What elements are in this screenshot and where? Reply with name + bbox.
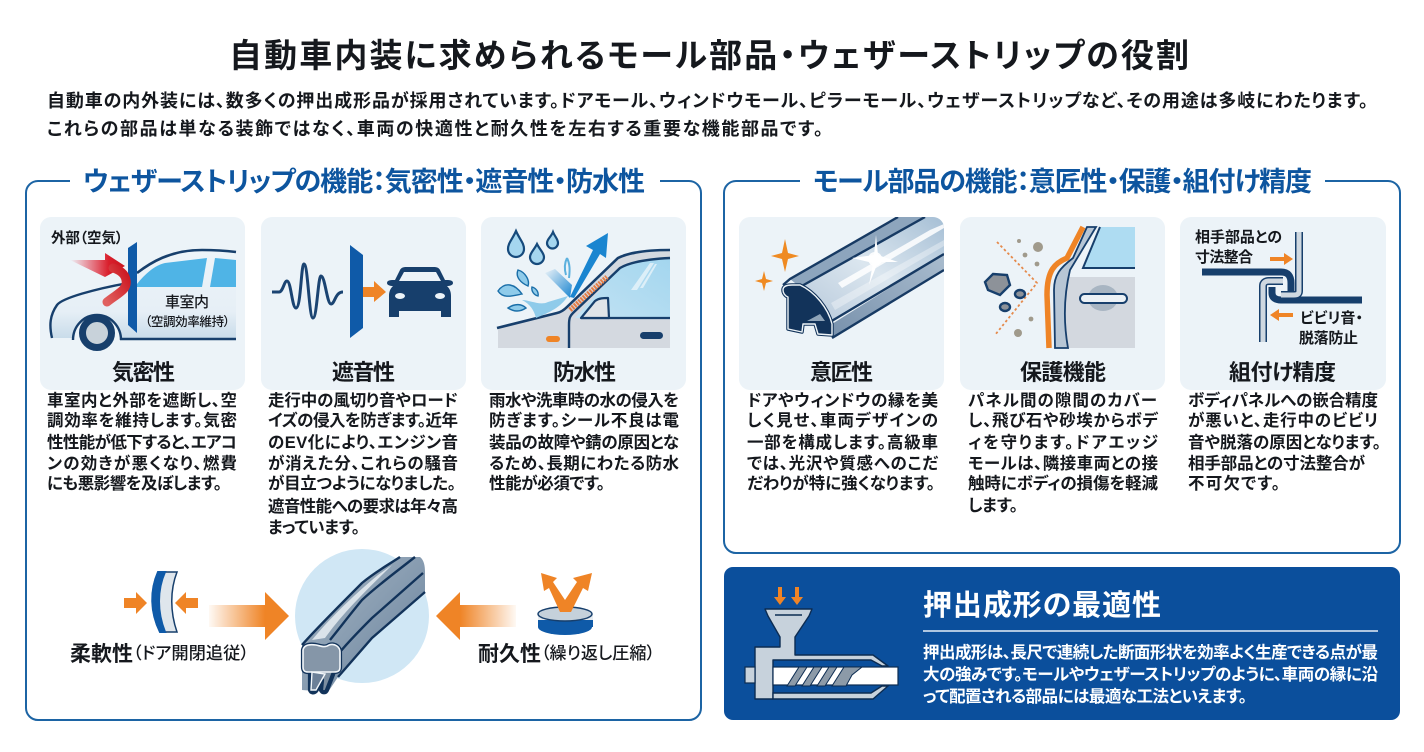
card title: 組付け精度	[1229, 360, 1336, 385]
icon: extruder	[745, 587, 898, 699]
body text: airtightness: ンの効きが悪くなり、燃費	[47, 453, 237, 473]
arrow: left	[209, 592, 289, 640]
label: outside: 外部（空気）	[51, 229, 123, 247]
banner text: 大の強みです。モールやウェザーストリップのように、車両の縁に沿	[923, 664, 1378, 684]
arrow: right	[436, 592, 516, 640]
card title: 遮音性	[332, 360, 395, 385]
body text: design: では、光沢や質感へのこだ	[747, 453, 938, 473]
card: waterproof	[481, 217, 686, 390]
card: airtightness	[40, 217, 245, 390]
body text: airtightness: にも悪影響を及ぼします。	[47, 473, 222, 493]
body text: design: しく見せ、車両デザインの	[747, 410, 938, 430]
label: flexibility: 柔軟性	[70, 643, 133, 666]
body text: protection	[968, 391, 1159, 515]
diagram: weatherstrip properties	[70, 549, 655, 692]
body text: sound insulation: が消えた分、これらの騒音	[268, 453, 458, 473]
body text: assembly: 不可欠です。	[1188, 473, 1280, 493]
body text: design	[747, 390, 938, 493]
label: durability	[478, 643, 655, 666]
body text: assembly: が悪いと、走行中のビビリ	[1188, 410, 1378, 430]
body text: assembly: 音や脱落の原因となります。	[1188, 432, 1381, 452]
label: rattle: ビビリ音・	[1300, 309, 1363, 327]
body text: protection: ィを守ります。ドアエッジ	[968, 433, 1158, 452]
icon: fit diagram: 寸法整合	[1195, 248, 1253, 266]
body text: waterproof	[489, 391, 680, 493]
card: protection	[960, 217, 1165, 390]
body text: sound insulation: 走行中の風切り音やロード	[268, 390, 458, 410]
body text: assembly: ボディパネルへの嵌合精度	[1188, 390, 1378, 410]
body text: sound insulation: 遮音性能への要求は年々高	[268, 496, 458, 516]
card title: 保護機能	[1020, 360, 1106, 385]
body text: design: ドアやウィンドウの縁を美	[747, 390, 938, 410]
body text: airtightness: 性性能が低下すると、エアコ	[47, 432, 237, 452]
body text: protection: パネル間の隙間のカバー	[968, 391, 1157, 410]
banner text: 押出成形は、長尺で連続した断面形状を効率よく生産できる点が最	[923, 642, 1378, 662]
intro text: 自動車の内外装には、数多くの押出成形品が採用されています。ドアモール、ウィンドウモール、ピラーモール、ウェザーストリップなど、その用途は多岐にわたります。	[47, 90, 1368, 111]
heading: molding: モール部品の機能：意匠性・保護・組付け精度	[813, 167, 1312, 197]
icon: molding profile	[755, 217, 944, 338]
body text: sound insulation	[268, 390, 458, 537]
icon: fit diagram: 脱落防止	[1299, 329, 1358, 347]
icon: water splash on car	[497, 231, 670, 348]
card title: 意匠性	[810, 360, 873, 385]
body text: waterproof: るため、長期にわたる防水	[489, 454, 680, 473]
icon: flexibility	[124, 572, 198, 632]
intro text: これらの部品は単なる装飾ではなく、車両の快適性と耐久性を左右する重要な機能部品です。	[47, 118, 823, 139]
label: dimension match: 相手部品との	[1195, 229, 1282, 246]
body text: waterproof: 雨水や洗車時の水の侵入を	[489, 391, 679, 410]
panel: weatherstrip functions	[26, 167, 701, 720]
body text: waterproof: 装品の故障や錆の原因とな	[489, 433, 679, 452]
body text: protection: モールは、隣接車両との接	[968, 454, 1158, 473]
card: sound insulation	[261, 217, 466, 390]
body text: airtightness: 調効率を維持します。気密	[47, 411, 238, 430]
label: durability: 耐久性	[478, 643, 541, 666]
body text: assembly: 相手部品との寸法整合が	[1188, 453, 1366, 473]
label: flexibility: （ドア開閉追従）	[133, 644, 249, 663]
body text: assembly	[1188, 390, 1381, 493]
banner text: って配置される部品には最適な工法といえます。	[923, 687, 1247, 706]
icon: durability	[538, 573, 593, 635]
body text: waterproof: 性能が必須です。	[489, 473, 605, 493]
icon: fit diagram	[1195, 229, 1363, 347]
body text: waterproof: 防ぎます。シール不良は電	[489, 410, 680, 430]
title: 自動車内装に求められるモール部品・ウェザーストリップの役割	[229, 37, 1189, 74]
panel: extrusion suitability banner	[724, 567, 1400, 720]
body text: airtightness	[47, 391, 238, 493]
label: flexibility	[70, 643, 249, 666]
heading: weatherstrip: ウェザーストリップの機能：気密性・遮音性・防水性	[83, 167, 645, 197]
body text: protection: し、飛び石や砂埃からボデ	[968, 410, 1159, 430]
panel: molding functions	[724, 167, 1400, 553]
icon: car airtightness: （空調効率維持）	[145, 314, 230, 329]
card: assembly	[1180, 217, 1386, 390]
body text: sound insulation: のEV化により、エンジン音	[268, 432, 458, 452]
banner text	[923, 642, 1378, 706]
icon: sound wave to car	[272, 245, 453, 338]
card title: 防水性	[553, 360, 616, 385]
label: cabin: 車室内	[165, 294, 209, 311]
body text: sound insulation: が目立つようになりました。	[268, 473, 456, 493]
body text: sound insulation: イズの侵入を防ぎます。近年	[268, 410, 458, 430]
body text: design: だわりが特に強くなります。	[747, 473, 935, 493]
icon: door edge protection	[985, 227, 1135, 348]
card: design	[739, 217, 944, 390]
intro text	[47, 90, 1368, 139]
body text: protection: します。	[968, 496, 1018, 515]
body text: airtightness: 車室内と外部を遮断し、空	[47, 391, 237, 410]
body text: protection: 触時にボディの損傷を軽減	[968, 473, 1158, 493]
body text: sound insulation: まっています。	[268, 518, 360, 537]
banner heading: 押出成形の最適性	[923, 589, 1161, 622]
label: durability: （繰り返し圧縮）	[541, 644, 655, 663]
icon: car airtightness	[50, 229, 236, 348]
icon: weatherstrip section	[302, 557, 425, 692]
body text: design: 一部を構成します。高級車	[747, 432, 938, 452]
card title: 気密性	[112, 360, 175, 385]
